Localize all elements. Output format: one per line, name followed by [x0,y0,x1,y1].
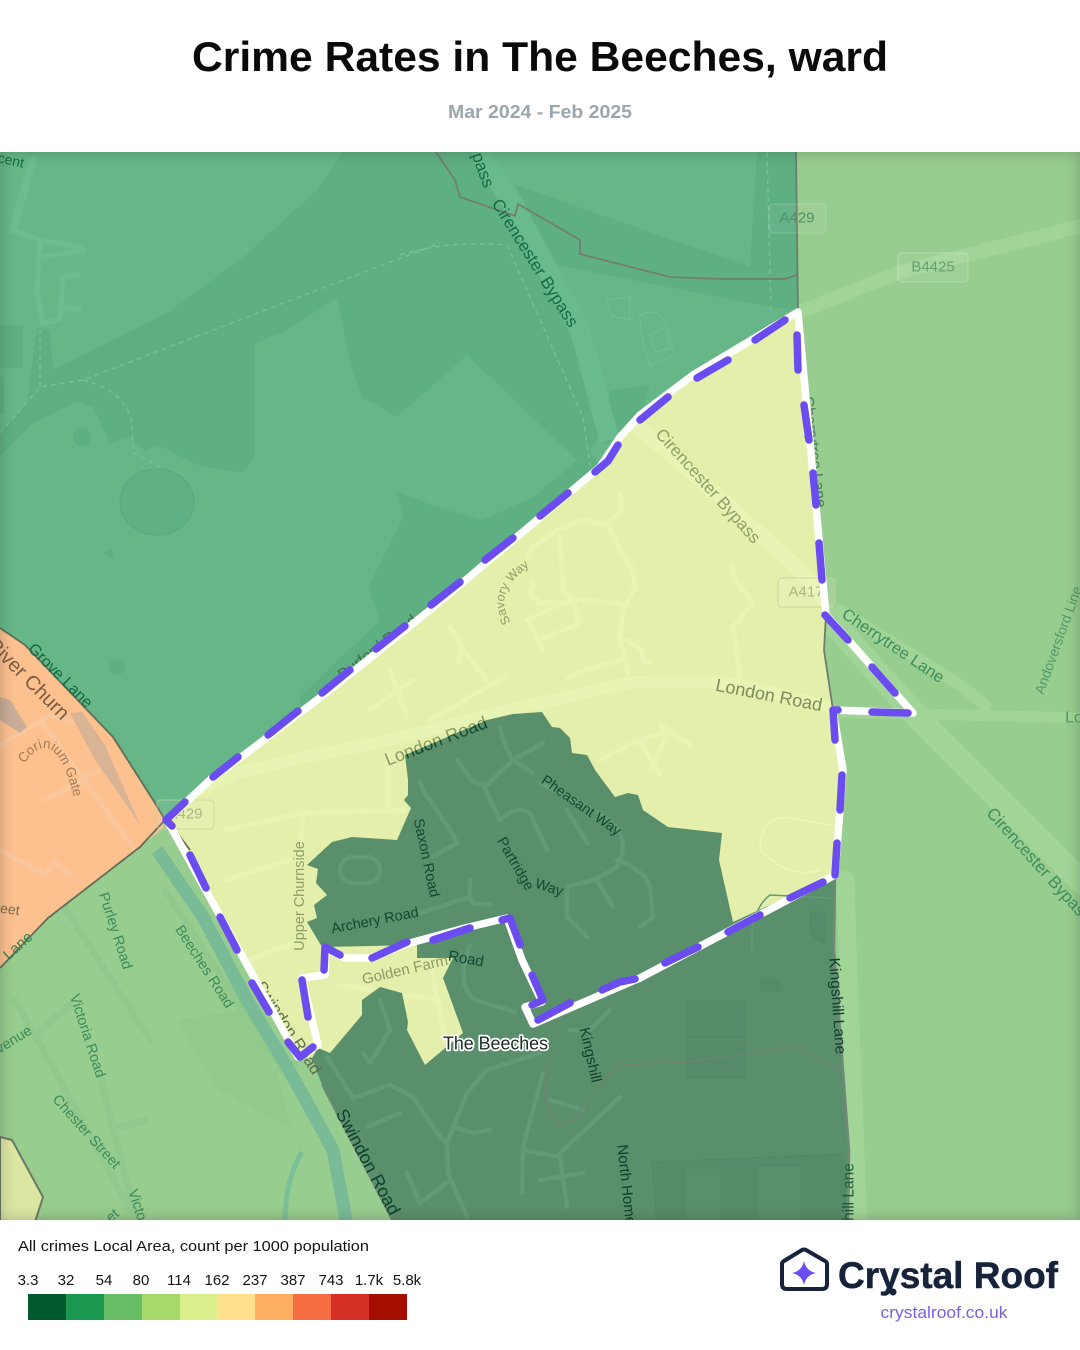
area: ward pale yellow [165,312,843,1070]
logo url: crystalroof.co.uk [880,1304,1008,1322]
shield: B4425: B4425 [911,258,955,276]
road shields [157,204,968,829]
Cirencester Bypass verge [480,152,610,440]
street labels: North Homestead [613,1144,643,1262]
street labels: London Road [714,675,824,715]
street labels: Cherrytree Lane [799,395,829,509]
logo keyring detail [890,1288,896,1296]
street labels: Cirencester Bypass [652,425,764,547]
legend scale labels: 32 [58,1272,74,1289]
shield: A417 [778,578,835,607]
street labels: pass [468,150,498,190]
street labels: Archery Road [330,905,420,937]
street labels: Kingshill [575,1026,605,1084]
street labels: Road [447,948,485,970]
park patch bottom-left [177,1010,293,1130]
legend scale labels: 80 [133,1272,149,1289]
roads in dark green area [327,727,830,1217]
roads in yellow area [175,420,835,1040]
street labels: Beeches Road [171,923,237,1011]
street labels: Saxon Road [410,817,442,899]
street labels: Cherrytree Lane [839,605,947,687]
shield: A429 north: A429 [779,210,815,226]
street labels: Victoria Road [66,992,108,1080]
roads bottom-left residential [15,890,295,1215]
street labels: Swindon Road [251,978,325,1078]
curved label: Savory Way: Savory Way [498,561,528,625]
legend scale labels: 387 [280,1272,306,1289]
street labels: Purley Road [95,891,135,971]
label: London Road dark section over dark area: London Road [382,712,490,770]
legend colour ramp [28,1294,407,1320]
fields in dark green area [652,939,844,1206]
street labels: Golden Farm [360,952,450,988]
street labels: Burford Road [335,612,421,684]
ponds small [82,428,124,675]
roads on light green areas [800,225,1080,1220]
shield: A429 west [157,800,214,829]
legend scale labels: 237 [242,1272,268,1289]
ward boundary: purple dashes [166,320,908,1057]
darker woodland patches [0,152,798,715]
street labels: Way [533,876,566,900]
legend scale labels: 743 [318,1272,344,1289]
area: dark green south [307,712,849,1220]
legend scale labels [18,1272,422,1289]
legend scale labels: 1.7k [355,1272,384,1289]
legend scale labels: 5.8k [393,1272,422,1289]
buildings north of ward [606,297,675,365]
street labels: Pheasant Way [538,773,625,840]
shield: A429 north [769,204,826,233]
street labels: Victo [124,1187,150,1223]
dashed footpaths [0,152,771,467]
shield: B4425 [898,253,968,282]
legend scale labels: 114 [167,1272,191,1289]
street labels: Grove Lane [24,640,96,712]
street labels: et [102,1205,122,1225]
street labels: Cirencester Bypass [488,195,582,331]
street labels: Swindon Road [332,1106,404,1218]
railway strip far west [0,697,27,733]
logo: Crystal Roof [782,1250,1059,1322]
title: Crime Rates in The Beeches, ward [192,33,888,80]
legend [18,1238,422,1320]
boundary lines [0,152,849,1220]
place label: The Beeches: The Beeches [443,1032,548,1054]
street labels: Partridge [493,835,537,893]
ward boundary: white base line [167,312,913,1057]
icon: house with sparkle [782,1250,827,1289]
street labels: hill Lane [840,1163,858,1221]
railway strip in orange [70,712,140,825]
legend scale labels: 162 [204,1272,230,1289]
street labels: Lane [0,929,36,963]
area: yellow inset south-west [0,1137,43,1222]
area: light green base [0,152,1080,1220]
north-west paths [13,160,84,323]
street labels: Upper Churnside [292,841,308,951]
shield: A429 west: A429 [167,806,203,822]
subtitle: date range: Mar 2024 - Feb 2025 [448,101,632,122]
legend title: All crimes Local Area, count per 1000 population [18,1238,369,1255]
shield: A417: A417 [788,584,824,600]
street labels: Chester Street [49,1092,123,1172]
legend scale labels: 3.3 [18,1272,38,1289]
river channel [157,850,347,1225]
orange roads [0,715,135,875]
area: orange west [0,628,165,968]
stream bottom-left [285,1152,302,1222]
legend scale labels: 54 [96,1272,112,1289]
pond [120,469,194,535]
curved label: Corinium Gate: Corinium Gate [18,739,80,796]
logo wordmark: Crystal Roof [838,1255,1059,1296]
area: mid green north-west [0,152,798,820]
street labels: Kingshill Lane [825,957,849,1055]
street labels: London Road [382,712,490,770]
